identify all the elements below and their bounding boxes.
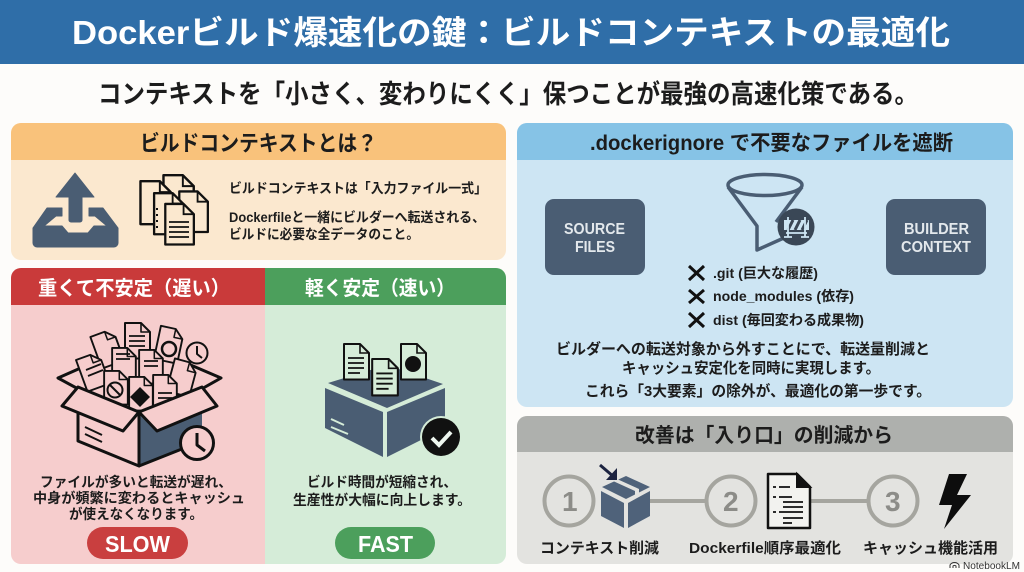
box: builder context: CONTEXT xyxy=(901,239,971,256)
list: excluded items: dist (毎回変わる成果物) xyxy=(713,312,864,328)
box: source files: SOURCE xyxy=(564,221,625,238)
panel: fast xyxy=(265,268,506,564)
heading: improvement: 改善は「入り口」の削減から xyxy=(635,423,893,447)
text: slow explanation: ファイルが多いと転送が遅れ、 xyxy=(40,474,232,490)
text: dockerignore explanation: キャッシュ安定化を同時に実現します。 xyxy=(622,359,880,377)
text: slow explanation: が使えなくなります。 xyxy=(69,506,203,522)
text: slow explanation xyxy=(33,474,245,522)
text: slow explanation: 中身が頻繁に変わるとキャッシュ xyxy=(33,490,245,506)
step 1: 1 xyxy=(562,486,578,517)
badge: slow: SLOW xyxy=(105,531,170,557)
text: fast explanation: 生産性が大幅に向上します。 xyxy=(293,492,471,508)
text: dockerignore explanation: これら「3大要素」の除外が、最適化の第一歩です。 xyxy=(585,382,931,400)
icon: box with arrow xyxy=(600,465,650,528)
panel: slow xyxy=(11,268,265,564)
icon: funnel with barrier xyxy=(728,174,814,250)
box: builder context xyxy=(886,199,986,275)
panel: build context xyxy=(11,123,506,260)
badge: fast: FAST xyxy=(358,531,413,557)
subtitle: コンテキストを「小さく、変わりにくく」保つことが最強の高速化策である。 xyxy=(98,79,918,109)
heading: fast: 軽く安定（速い） xyxy=(305,277,455,300)
title: Dockerビルド爆速化の鍵：ビルドコンテキストの最適化 xyxy=(72,14,950,51)
heading: slow: 重くて不安定（遅い） xyxy=(38,277,230,300)
list: excluded items: .git (巨大な履歴) xyxy=(713,265,818,281)
icon: light box xyxy=(325,344,462,458)
badge: fast xyxy=(335,527,435,559)
icon: lightning bolt xyxy=(939,474,971,529)
list: excluded items: node_modules (依存) xyxy=(713,288,854,304)
box: builder context: BUILDER xyxy=(904,221,969,238)
heading: dockerignore: .dockerignore で不要なファイルを遮断 xyxy=(590,132,953,155)
text: definition xyxy=(229,180,487,242)
watermark: NotebookLM: NotebookLM xyxy=(963,561,1020,572)
list: excluded items xyxy=(689,265,864,328)
label: step 3: キャッシュ機能活用 xyxy=(863,539,998,557)
icon: overflowing box xyxy=(58,323,221,466)
text: dockerignore explanation xyxy=(556,340,931,400)
text: definition: ビルドに必要な全データのこと。 xyxy=(229,226,419,242)
label: step 1: コンテキスト削減 xyxy=(540,539,659,557)
box: source files xyxy=(545,199,645,275)
step 3 xyxy=(863,474,998,557)
icon: upload tray xyxy=(33,173,118,247)
text: fast explanation xyxy=(293,474,471,508)
text: fast explanation: ビルド時間が短縮され、 xyxy=(307,474,457,490)
icon: Dockerfile document xyxy=(768,474,810,528)
badge: slow xyxy=(87,527,188,559)
text: definition: Dockerfileと一緒にビルダーへ転送される、 xyxy=(229,209,485,225)
panel: dockerignore xyxy=(517,123,1013,407)
text: definition: ビルドコンテキストは「入力ファイル一式」 xyxy=(229,180,487,196)
text: dockerignore explanation: ビルダーへの転送対象から外すことにで、転送量削減と xyxy=(556,340,930,358)
heading: build context: ビルドコンテキストとは？ xyxy=(140,131,377,156)
step 2: 2 xyxy=(723,486,739,517)
icon: documents xyxy=(140,175,208,244)
box: source files: FILES xyxy=(575,239,615,256)
label: step 2: Dockerfile順序最適化 xyxy=(689,539,841,557)
panel: improvement steps xyxy=(517,416,1013,564)
connector line xyxy=(640,499,868,503)
step 1 xyxy=(540,465,659,557)
step 2 xyxy=(689,474,841,557)
step 3: 3 xyxy=(885,486,901,517)
header banner xyxy=(0,0,1024,64)
